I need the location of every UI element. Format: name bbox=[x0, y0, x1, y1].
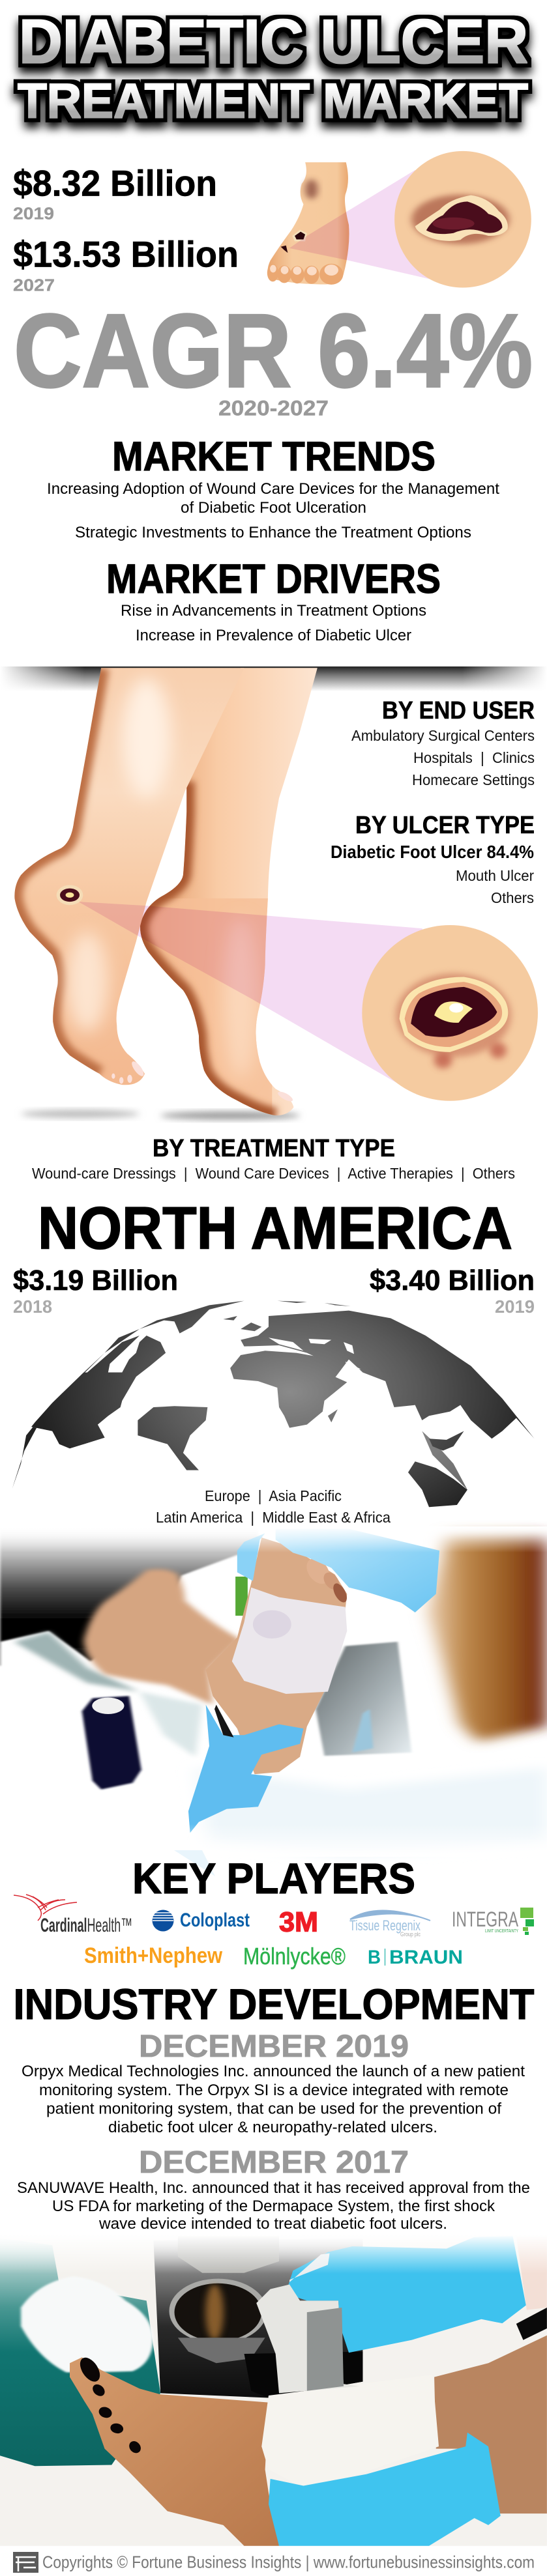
segment: by treatment type bbox=[32, 1135, 515, 1182]
text: market trends list bbox=[47, 480, 499, 541]
stat: 2027 market value bbox=[13, 233, 239, 294]
title: DIABETIC ULCER bbox=[19, 7, 528, 77]
text: december 2017 development: SANUWAVE Health, Inc. announced that it has received approval from the bbox=[17, 2179, 530, 2197]
heading: market trends: MARKET TRENDS bbox=[112, 434, 436, 479]
logo: B Braun: BRAUN bbox=[389, 1947, 463, 1968]
stat: north america 2019 bbox=[370, 1265, 535, 1317]
heading: key players: KEY PLAYERS bbox=[132, 1854, 415, 1902]
segment: by ulcer type: Others bbox=[491, 889, 534, 906]
text: market drivers list: Increase in Prevalence of Diabetic Ulcer bbox=[136, 627, 411, 644]
text: market trends list: Strategic Investments to Enhance the Treatment Options bbox=[75, 524, 471, 541]
segment: by ulcer type: Mouth Ulcer bbox=[456, 867, 534, 884]
segment: by end user: BY END USER bbox=[382, 697, 535, 724]
stat: north america 2018: $3.19 Billion bbox=[13, 1265, 178, 1296]
text: market trends list: of Diabetic Foot Ulceration bbox=[181, 499, 366, 517]
text: december 2019 development: Orpyx Medical Technologies Inc. announced the launch of a new patient bbox=[22, 2063, 525, 2080]
illustration: legs with magnified ulcer bbox=[0, 665, 547, 1119]
segment: by end user: Homecare Settings bbox=[412, 771, 535, 788]
heading: north america: NORTH AMERICA bbox=[38, 1195, 512, 1261]
stat: 2019 market value bbox=[13, 163, 217, 223]
logo: Cardinal Health: CardinalHealth™ bbox=[40, 1915, 132, 1936]
segment: by treatment type: BY TREATMENT TYPE bbox=[153, 1135, 395, 1162]
illustration: foot with magnified ulcer bbox=[267, 151, 531, 288]
heading: december 2017: DECEMBER 2017 bbox=[139, 2145, 409, 2180]
logo: Tissue Regenix: Group plc bbox=[400, 1931, 421, 1938]
logo: Molnlycke: Mölnlycke® bbox=[243, 1943, 346, 1969]
logo: Integra: LIMIT UNCERTAINTY bbox=[485, 1929, 518, 1934]
icon: Fortune Business Insights logo bbox=[13, 2552, 38, 2573]
logo: Integra: INTEGRA bbox=[452, 1908, 518, 1931]
logo: Smith+Nephew: Smith+Nephew bbox=[84, 1943, 222, 1968]
text: december 2019 development: diabetic foot ulcer & neuropathy-related ulcers. bbox=[108, 2119, 437, 2136]
logo: Tissue Regenix: Tissue Regenix bbox=[349, 1917, 421, 1934]
logo: Tissue Regenix bbox=[349, 1910, 430, 1938]
text: december 2017 development: US FDA for marketing of the Dermapace System, the first shock bbox=[52, 2197, 495, 2215]
stat: 2019 market value: 2019 bbox=[13, 203, 54, 223]
segment: by end user bbox=[351, 697, 535, 788]
heading: market drivers: MARKET DRIVERS bbox=[106, 556, 441, 602]
segment: by treatment type: Wound-care Dressings | Wound Care Devices | Active Therapies | Others bbox=[32, 1165, 515, 1182]
text: december 2019 development bbox=[22, 2063, 525, 2136]
photo: clinician dressing a foot bbox=[0, 1526, 547, 1876]
stat: north america 2019: 2019 bbox=[495, 1296, 535, 1317]
text: other regions bbox=[156, 1487, 391, 1526]
segment: by end user: Ambulatory Surgical Centers bbox=[351, 727, 535, 744]
text: other regions: Europe | Asia Pacific bbox=[205, 1487, 342, 1504]
logo: B Braun: B bbox=[368, 1947, 381, 1968]
title: TREATMENT MARKET bbox=[18, 73, 528, 128]
segment: by end user: Hospitals | Clinics bbox=[413, 749, 535, 766]
stat: north america 2019: $3.40 Billion bbox=[370, 1265, 535, 1296]
photo: gloved hands bandaging an ankle bbox=[0, 2235, 547, 2546]
text: market drivers list: Rise in Advancements in Treatment Options bbox=[121, 602, 426, 620]
segment: by ulcer type bbox=[331, 812, 535, 906]
logo: Coloplast: Coloplast bbox=[180, 1910, 250, 1931]
stat: north america 2018 bbox=[13, 1265, 178, 1317]
logo: Cardinal Health bbox=[14, 1895, 132, 1936]
text: december 2019 development: patient monitoring system, that can be used for the prevention of bbox=[46, 2100, 501, 2117]
logo: Coloplast bbox=[152, 1910, 250, 1931]
title bbox=[18, 7, 528, 128]
CAGR period: 2020-2027 bbox=[218, 396, 329, 420]
text: other regions: Latin America | Middle East & Africa bbox=[156, 1509, 391, 1526]
stat: 2027 market value: $13.53 Billion bbox=[13, 233, 239, 275]
heading: december 2019: DECEMBER 2019 bbox=[139, 2029, 409, 2064]
text: december 2019 development: monitoring system. The Orpyx SI is a device integrated with remote bbox=[39, 2082, 509, 2099]
stat: 2019 market value: $8.32 Billion bbox=[13, 163, 217, 203]
stat: north america 2018: 2018 bbox=[13, 1296, 52, 1317]
text: market trends list: Increasing Adoption of Wound Care Devices for the Management bbox=[47, 480, 499, 498]
logo: 3M: 3M bbox=[279, 1906, 318, 1938]
text: december 2017 development bbox=[17, 2179, 530, 2233]
text: december 2017 development: wave device intended to treat diabetic foot ulcers. bbox=[98, 2215, 447, 2233]
world map globe bbox=[12, 1301, 535, 1507]
stat: 2027 market value: 2027 bbox=[13, 275, 55, 294]
text: market drivers list bbox=[121, 602, 426, 644]
